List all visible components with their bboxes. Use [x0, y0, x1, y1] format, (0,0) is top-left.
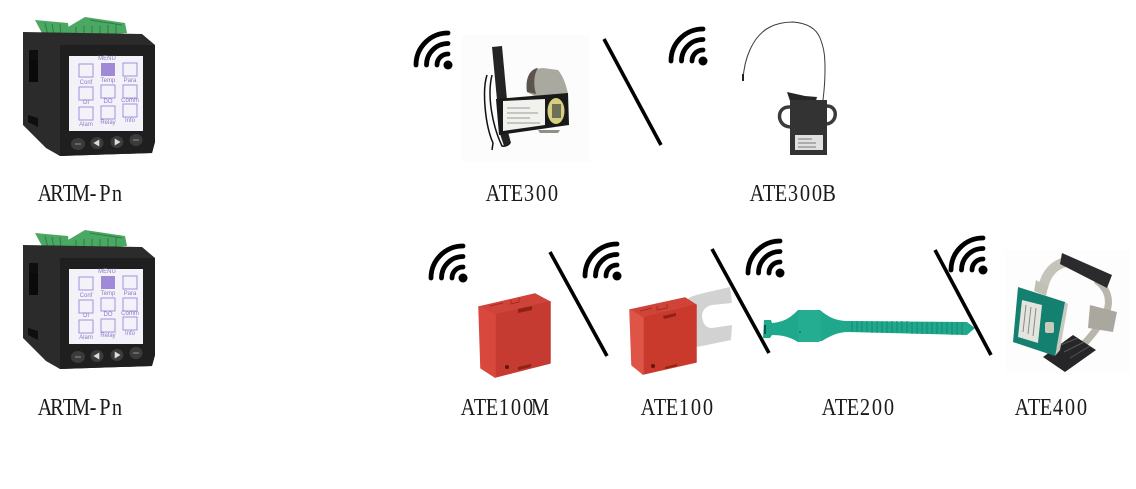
device: ARTM-Pn meter bottom: Comm	[121, 311, 139, 317]
device: ARTM-Pn meter top: Alam	[79, 122, 93, 128]
device: ARTM-Pn meter top: Temp	[101, 78, 116, 84]
device: ARTM-Pn meter bottom: Temp	[101, 291, 116, 297]
label: ATE100M: ATE100M	[461, 393, 549, 420]
device: ARTM-Pn meter bottom	[23, 230, 155, 369]
divider: ATE100M / ATE100	[550, 252, 607, 356]
device: ARTM-Pn meter top: Relay	[100, 120, 116, 126]
icon: wifi ATE300	[416, 33, 452, 70]
device: ARTM-Pn meter top: DI	[83, 100, 89, 106]
device: ARTM-Pn meter top: Info	[125, 118, 136, 124]
label: ATE300: ATE300	[486, 179, 558, 206]
label: ATE200: ATE200	[822, 393, 894, 420]
device: ARTM-Pn meter top: MENU	[98, 56, 116, 62]
device: ARTM-Pn meter bottom: MENU	[98, 269, 116, 275]
icon: wifi ATE300B	[671, 29, 708, 66]
device: ATE100	[630, 287, 732, 374]
device: ARTM-Pn meter bottom: DO	[104, 312, 113, 318]
device: ARTM-Pn meter bottom: Conf	[80, 293, 93, 299]
device: ARTM-Pn meter bottom: Relay	[100, 333, 116, 339]
device: ARTM-Pn meter top	[23, 17, 155, 156]
device: ATE300B	[742, 22, 835, 155]
device: ARTM-Pn meter top: DO	[104, 99, 113, 105]
device: ATE300	[462, 35, 590, 162]
icon: wifi ATE100	[585, 244, 622, 280]
divider: ATE100 / ATE200	[712, 249, 769, 353]
device: ARTM-Pn meter bottom: Alam	[79, 335, 93, 341]
label: ATE100: ATE100	[641, 393, 713, 420]
label: ARTM-Pn bottom: ARTM-Pn	[38, 393, 122, 420]
device: ATE200	[763, 310, 975, 342]
divider: ATE200 / ATE400	[935, 250, 991, 355]
device: ARTM-Pn meter bottom: Para	[124, 291, 137, 297]
device: ATE100M	[479, 294, 550, 377]
device: ARTM-Pn meter top: Para	[124, 78, 137, 84]
device: ARTM-Pn meter top: Comm	[121, 98, 139, 104]
device: ARTM-Pn meter bottom: DI	[83, 313, 89, 319]
label: ARTM-Pn top: ARTM-Pn	[38, 179, 122, 206]
divider: ATE300 / ATE300B	[604, 39, 661, 145]
icon: wifi ATE400	[951, 238, 988, 274]
label: ATE400: ATE400	[1015, 393, 1087, 420]
icon: wifi ATE200	[748, 241, 784, 278]
icon: wifi ATE100M	[431, 246, 468, 282]
device: ARTM-Pn meter top: Conf	[80, 80, 93, 86]
label: ATE300B: ATE300B	[750, 179, 836, 206]
device: ATE400	[1005, 250, 1130, 373]
device: ARTM-Pn meter bottom: Info	[125, 331, 136, 337]
